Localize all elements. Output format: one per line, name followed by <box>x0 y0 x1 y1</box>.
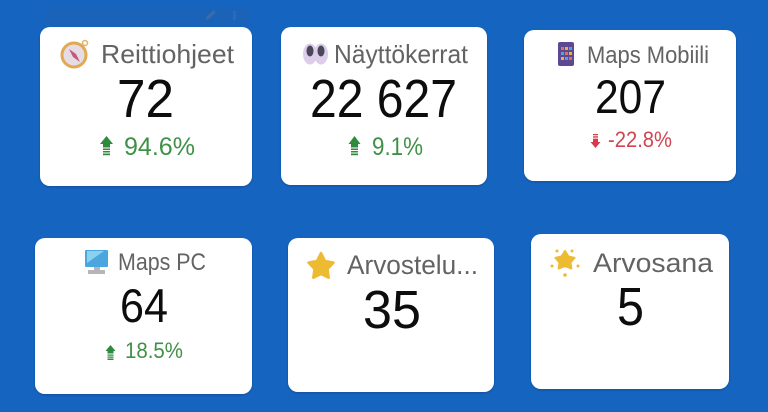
icon: compass <box>62 40 88 67</box>
icon: eyes <box>303 44 328 64</box>
icon: up arrow <box>100 136 113 155</box>
heading: Maps Mobiili <box>587 42 709 69</box>
icon: up arrow <box>348 136 360 155</box>
icon: phone <box>558 42 574 66</box>
icon: monitor <box>85 250 108 274</box>
faint toolbar <box>45 8 250 25</box>
change: 18.5% <box>125 338 183 363</box>
value: 35 <box>363 280 421 340</box>
value: 5 <box>617 277 644 337</box>
icon: up arrow <box>106 345 116 360</box>
change: 9.1% <box>372 133 423 161</box>
heading: Arvosana <box>593 248 714 278</box>
icon: star <box>308 253 334 278</box>
change: 94.6% <box>124 133 195 161</box>
value: 72 <box>117 69 174 129</box>
panel: Arvosana <box>531 234 729 389</box>
heading: Näyttökerrat <box>334 39 469 69</box>
heading: Maps PC <box>118 249 206 276</box>
panel: Maps PC <box>35 238 252 394</box>
panel: Näyttökerrat <box>281 27 487 185</box>
value: 207 <box>595 70 666 123</box>
heading: Arvostelu... <box>347 250 478 280</box>
change: -22.8% <box>608 127 672 152</box>
icon: down arrow <box>590 134 600 148</box>
panel: Arvostelu... <box>288 238 494 392</box>
heading: Reittiohjeet <box>101 39 235 69</box>
icon: sparkling star <box>550 250 580 277</box>
value: 64 <box>120 279 168 332</box>
value: 22 627 <box>310 69 457 129</box>
panel: Maps Mobiili <box>524 30 736 181</box>
panel: Reittiohjeet <box>40 27 252 186</box>
